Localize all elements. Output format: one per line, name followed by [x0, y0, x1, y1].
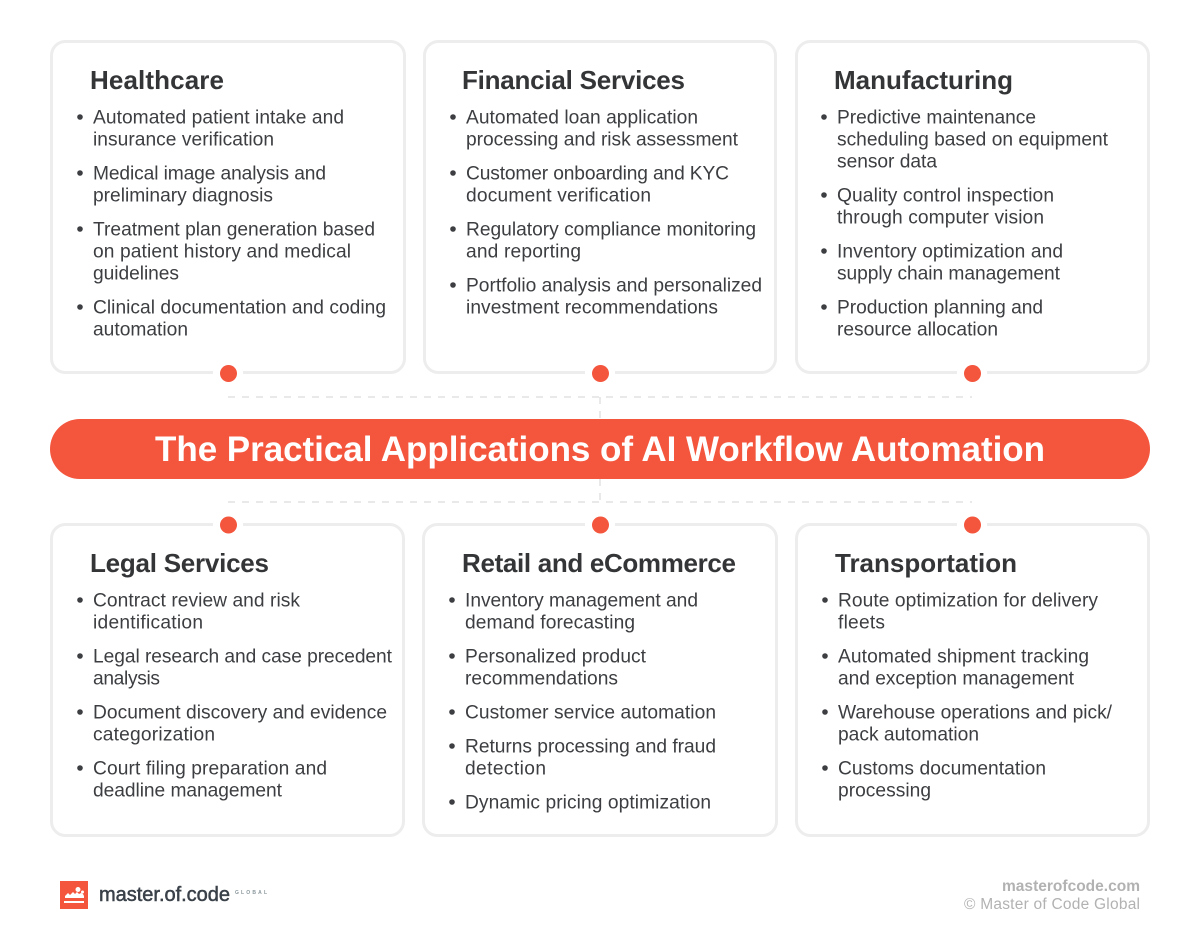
heading: Manufacturing: Manufacturing — [834, 65, 1013, 95]
list: Healthcare items: automation — [93, 320, 188, 341]
footer credits — [964, 878, 1140, 913]
heading: Healthcare: Healthcare — [90, 65, 224, 95]
list: Retail and eCommerce items: Customer service automation — [465, 703, 716, 724]
panel: Manufacturing — [796, 42, 1148, 382]
list: Manufacturing items: Predictive maintenance — [837, 108, 1036, 129]
dot: Legal Services connector — [220, 516, 237, 534]
connector lines: top — [228, 397, 972, 419]
list: Healthcare items: Automated patient intake and — [93, 108, 344, 129]
list: Transportation items: Automated shipment tracking — [838, 647, 1089, 668]
list: Retail and eCommerce items: Returns processing and fraud — [465, 737, 716, 758]
list: Transportation items — [822, 591, 1113, 802]
list: Financial Services items — [450, 108, 762, 319]
website: masterofcode.com — [1002, 878, 1140, 895]
list: Healthcare items: insurance verification — [93, 130, 274, 151]
list: Manufacturing items — [821, 108, 1109, 341]
heading: Retail and eCommerce: Retail and eCommerce — [462, 548, 736, 578]
dot: Healthcare connector — [220, 365, 237, 382]
list: Financial Services items: Automated loan application — [466, 108, 698, 129]
connector lines: bottom — [228, 479, 972, 502]
list: Legal Services items — [77, 591, 393, 802]
list: Manufacturing items: scheduling based on equipment — [837, 130, 1109, 151]
list: Legal Services items: categorization — [93, 725, 215, 746]
list: Healthcare items: Treatment plan generation based — [93, 220, 375, 241]
list: Healthcare items: preliminary diagnosis — [93, 186, 273, 207]
list: Retail and eCommerce items: Dynamic pricing optimization — [465, 793, 711, 814]
list: Financial Services items: processing and risk assessment — [466, 130, 739, 151]
logo wordmark: master.of.code — [99, 884, 230, 906]
list: Retail and eCommerce items: Inventory management and — [465, 591, 698, 612]
heading: Transportation: Transportation — [835, 548, 1017, 578]
list: Legal Services items: identification — [93, 613, 203, 634]
list: Legal Services items: Legal research and case precedent — [93, 647, 393, 668]
list: Retail and eCommerce items: detection — [465, 759, 546, 780]
dot: Financial Services connector — [592, 365, 609, 382]
list: Financial Services items: and reporting — [466, 242, 581, 263]
icon: logo mark — [60, 881, 88, 909]
list: Manufacturing items: Production planning and — [837, 298, 1043, 319]
list: Financial Services items: Regulatory compliance monitoring — [466, 220, 756, 241]
panel: Transportation — [796, 516, 1148, 836]
list: Retail and eCommerce items — [449, 591, 716, 814]
list: Manufacturing items: resource allocation — [837, 320, 998, 341]
heading: Financial Services: Financial Services — [462, 65, 685, 95]
list: Financial Services items: investment recommendations — [466, 298, 718, 319]
list: Legal Services items: analysis — [93, 669, 160, 690]
list: Financial Services items: document verification — [466, 186, 651, 207]
list: Healthcare items — [77, 108, 386, 341]
logo suffix: GLOBAL — [235, 890, 267, 896]
list: Financial Services items: Customer onboarding and KYC — [466, 164, 729, 185]
dot: Transportation connector — [964, 516, 981, 534]
panel: Legal Services — [52, 516, 404, 836]
list: Transportation items: Route optimization for delivery — [838, 591, 1098, 612]
copyright: © Master of Code Global — [964, 896, 1140, 913]
list: Transportation items: fleets — [838, 613, 885, 634]
list: Retail and eCommerce items: demand forecasting — [465, 613, 635, 634]
list: Transportation items: pack automation — [838, 725, 979, 746]
list: Manufacturing items: through computer vision — [837, 208, 1044, 229]
dot: Retail and eCommerce connector — [592, 516, 609, 534]
list: Legal Services items: Court filing preparation and — [93, 759, 327, 780]
list: Transportation items: Customs documentation — [838, 759, 1046, 780]
panel: Healthcare — [52, 42, 404, 382]
list: Manufacturing items: Quality control inspection — [837, 186, 1054, 207]
list: Healthcare items: on patient history and medical — [93, 242, 351, 263]
list: Healthcare items: Clinical documentation and coding — [93, 298, 386, 319]
list: Healthcare items: guidelines — [93, 264, 179, 285]
list: Transportation items: processing — [838, 781, 931, 802]
title: The Practical Applications of AI Workflow Automation — [155, 430, 1045, 469]
panel: Financial Services — [424, 42, 776, 382]
list: Healthcare items: Medical image analysis and — [93, 164, 326, 185]
list: Transportation items: and exception management — [838, 669, 1075, 690]
dot: Manufacturing connector — [964, 365, 981, 382]
panel: Retail and eCommerce — [424, 516, 776, 836]
list: Retail and eCommerce items: Personalized product — [465, 647, 647, 668]
list: Legal Services items: deadline management — [93, 781, 283, 802]
list: Legal Services items: Document discovery and evidence — [93, 703, 387, 724]
title banner — [50, 419, 1150, 479]
list: Transportation items: Warehouse operations and pick/ — [838, 703, 1113, 724]
list: Financial Services items: Portfolio analysis and personalized — [466, 276, 762, 297]
list: Manufacturing items: Inventory optimization and — [837, 242, 1063, 263]
list: Manufacturing items: sensor data — [837, 152, 937, 173]
list: Retail and eCommerce items: recommendations — [465, 669, 618, 690]
list: Manufacturing items: supply chain management — [837, 264, 1061, 285]
heading: Legal Services: Legal Services — [90, 548, 269, 578]
list: Legal Services items: Contract review and risk — [93, 591, 300, 612]
logo: master.of.code global — [60, 881, 267, 909]
